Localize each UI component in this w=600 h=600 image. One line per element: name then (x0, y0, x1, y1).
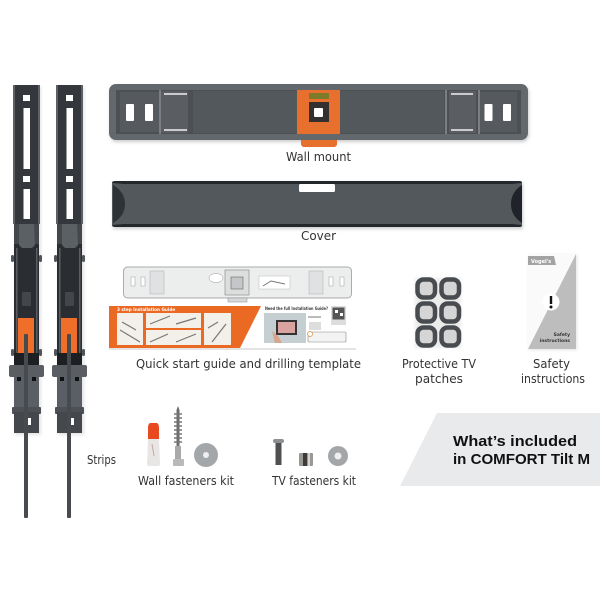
safety instructions booklet: Safety (554, 332, 570, 338)
full installation guide panel: Need the full Installation Guide? (265, 306, 328, 312)
what's included banner (400, 413, 600, 486)
wall mount (109, 84, 529, 147)
wall washer (194, 443, 218, 467)
drilling template (124, 267, 352, 302)
TV bolt (273, 439, 284, 465)
text: patches (415, 372, 463, 386)
wall screw (173, 406, 184, 466)
wall fasteners kit label: Wall fasteners kit (138, 474, 234, 488)
what's included banner: in COMFORT Tilt M (453, 451, 590, 468)
TV fasteners kit (273, 439, 348, 466)
TV spacer (299, 453, 313, 466)
safety instructions booklet: Vogel's (531, 259, 551, 265)
strips: right bracket (52, 85, 87, 518)
what's included banner: What’s included (453, 433, 577, 450)
safety instructions label: Safety (533, 357, 570, 371)
quick start guide and drilling template (109, 267, 356, 350)
safety instructions booklet: instructions (540, 338, 570, 344)
text: instructions (521, 372, 585, 386)
wall fasteners kit (147, 406, 218, 467)
TV washer (328, 446, 348, 466)
strips: left bracket (9, 85, 44, 518)
cover (112, 181, 523, 229)
orange install guide band: 3 step Installation Guide (117, 307, 175, 312)
orange install guide band (109, 306, 261, 348)
strips label: Strips (87, 453, 116, 467)
TV fasteners kit label: TV fasteners kit (271, 474, 356, 488)
safety instructions booklet (528, 254, 577, 350)
protective TV patches label: Protective TV (402, 357, 477, 371)
cover label: Cover (301, 229, 337, 243)
protective TV patches (415, 278, 461, 348)
full installation guide panel (264, 306, 346, 343)
orange wall mount plate (297, 90, 340, 147)
wall plug (147, 423, 160, 466)
quick start guide label: Quick start guide and drilling template (136, 357, 361, 371)
wall mount label: Wall mount (286, 150, 351, 164)
